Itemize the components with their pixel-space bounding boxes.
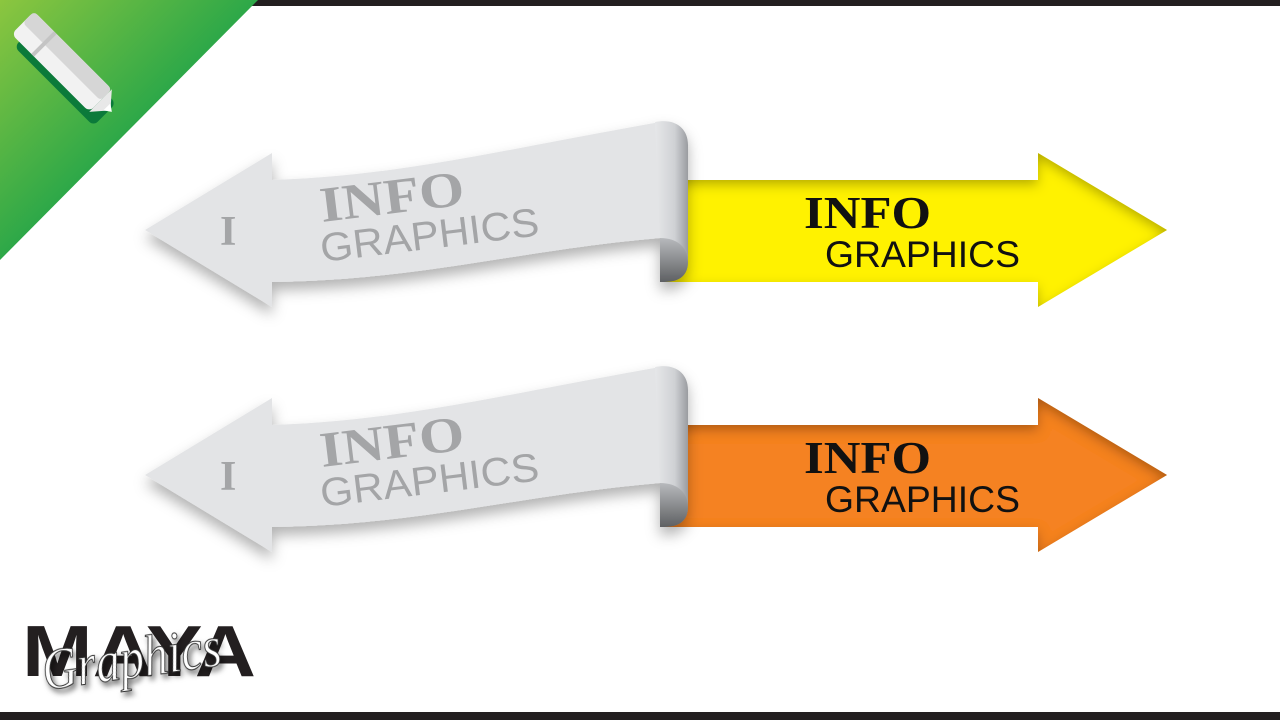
arrow: gray ribbon left 2 <box>145 366 688 552</box>
green corner triangle <box>0 0 258 260</box>
text: gray I INFO GRAPHICS: GRAPHICS <box>318 200 541 271</box>
text: gray I INFO GRAPHICS 2: I <box>220 454 236 500</box>
text: orange INFO GRAPHICS: GRAPHICS <box>825 479 1020 520</box>
bottom black bar <box>0 712 1280 720</box>
text: yellow INFO GRAPHICS: GRAPHICS <box>825 234 1020 275</box>
arrow: orange right <box>660 398 1167 552</box>
top black bar <box>250 0 1280 6</box>
text: gray I INFO GRAPHICS: INFO <box>317 160 467 233</box>
text: orange INFO GRAPHICS <box>804 432 1020 520</box>
text: gray I INFO GRAPHICS <box>220 160 541 271</box>
row 2 <box>145 366 1167 552</box>
text: gray I INFO GRAPHICS: I <box>220 209 236 255</box>
row 1 <box>145 121 1167 307</box>
arrow: gray ribbon left <box>145 121 688 307</box>
text: yellow INFO GRAPHICS <box>804 187 1020 275</box>
logo: MAYA Graphics: Graphics <box>38 613 225 703</box>
logo: MAYA Graphics: MAYA <box>22 612 256 692</box>
text: gray I INFO GRAPHICS 2: INFO <box>317 405 467 478</box>
text: orange INFO GRAPHICS: INFO <box>804 432 931 483</box>
text: gray I INFO GRAPHICS 2 <box>220 405 541 516</box>
arrow: yellow right <box>660 153 1167 307</box>
text: yellow INFO GRAPHICS: INFO <box>804 187 931 238</box>
icon: pencil <box>6 11 123 128</box>
text: gray I INFO GRAPHICS 2: GRAPHICS <box>318 445 541 516</box>
